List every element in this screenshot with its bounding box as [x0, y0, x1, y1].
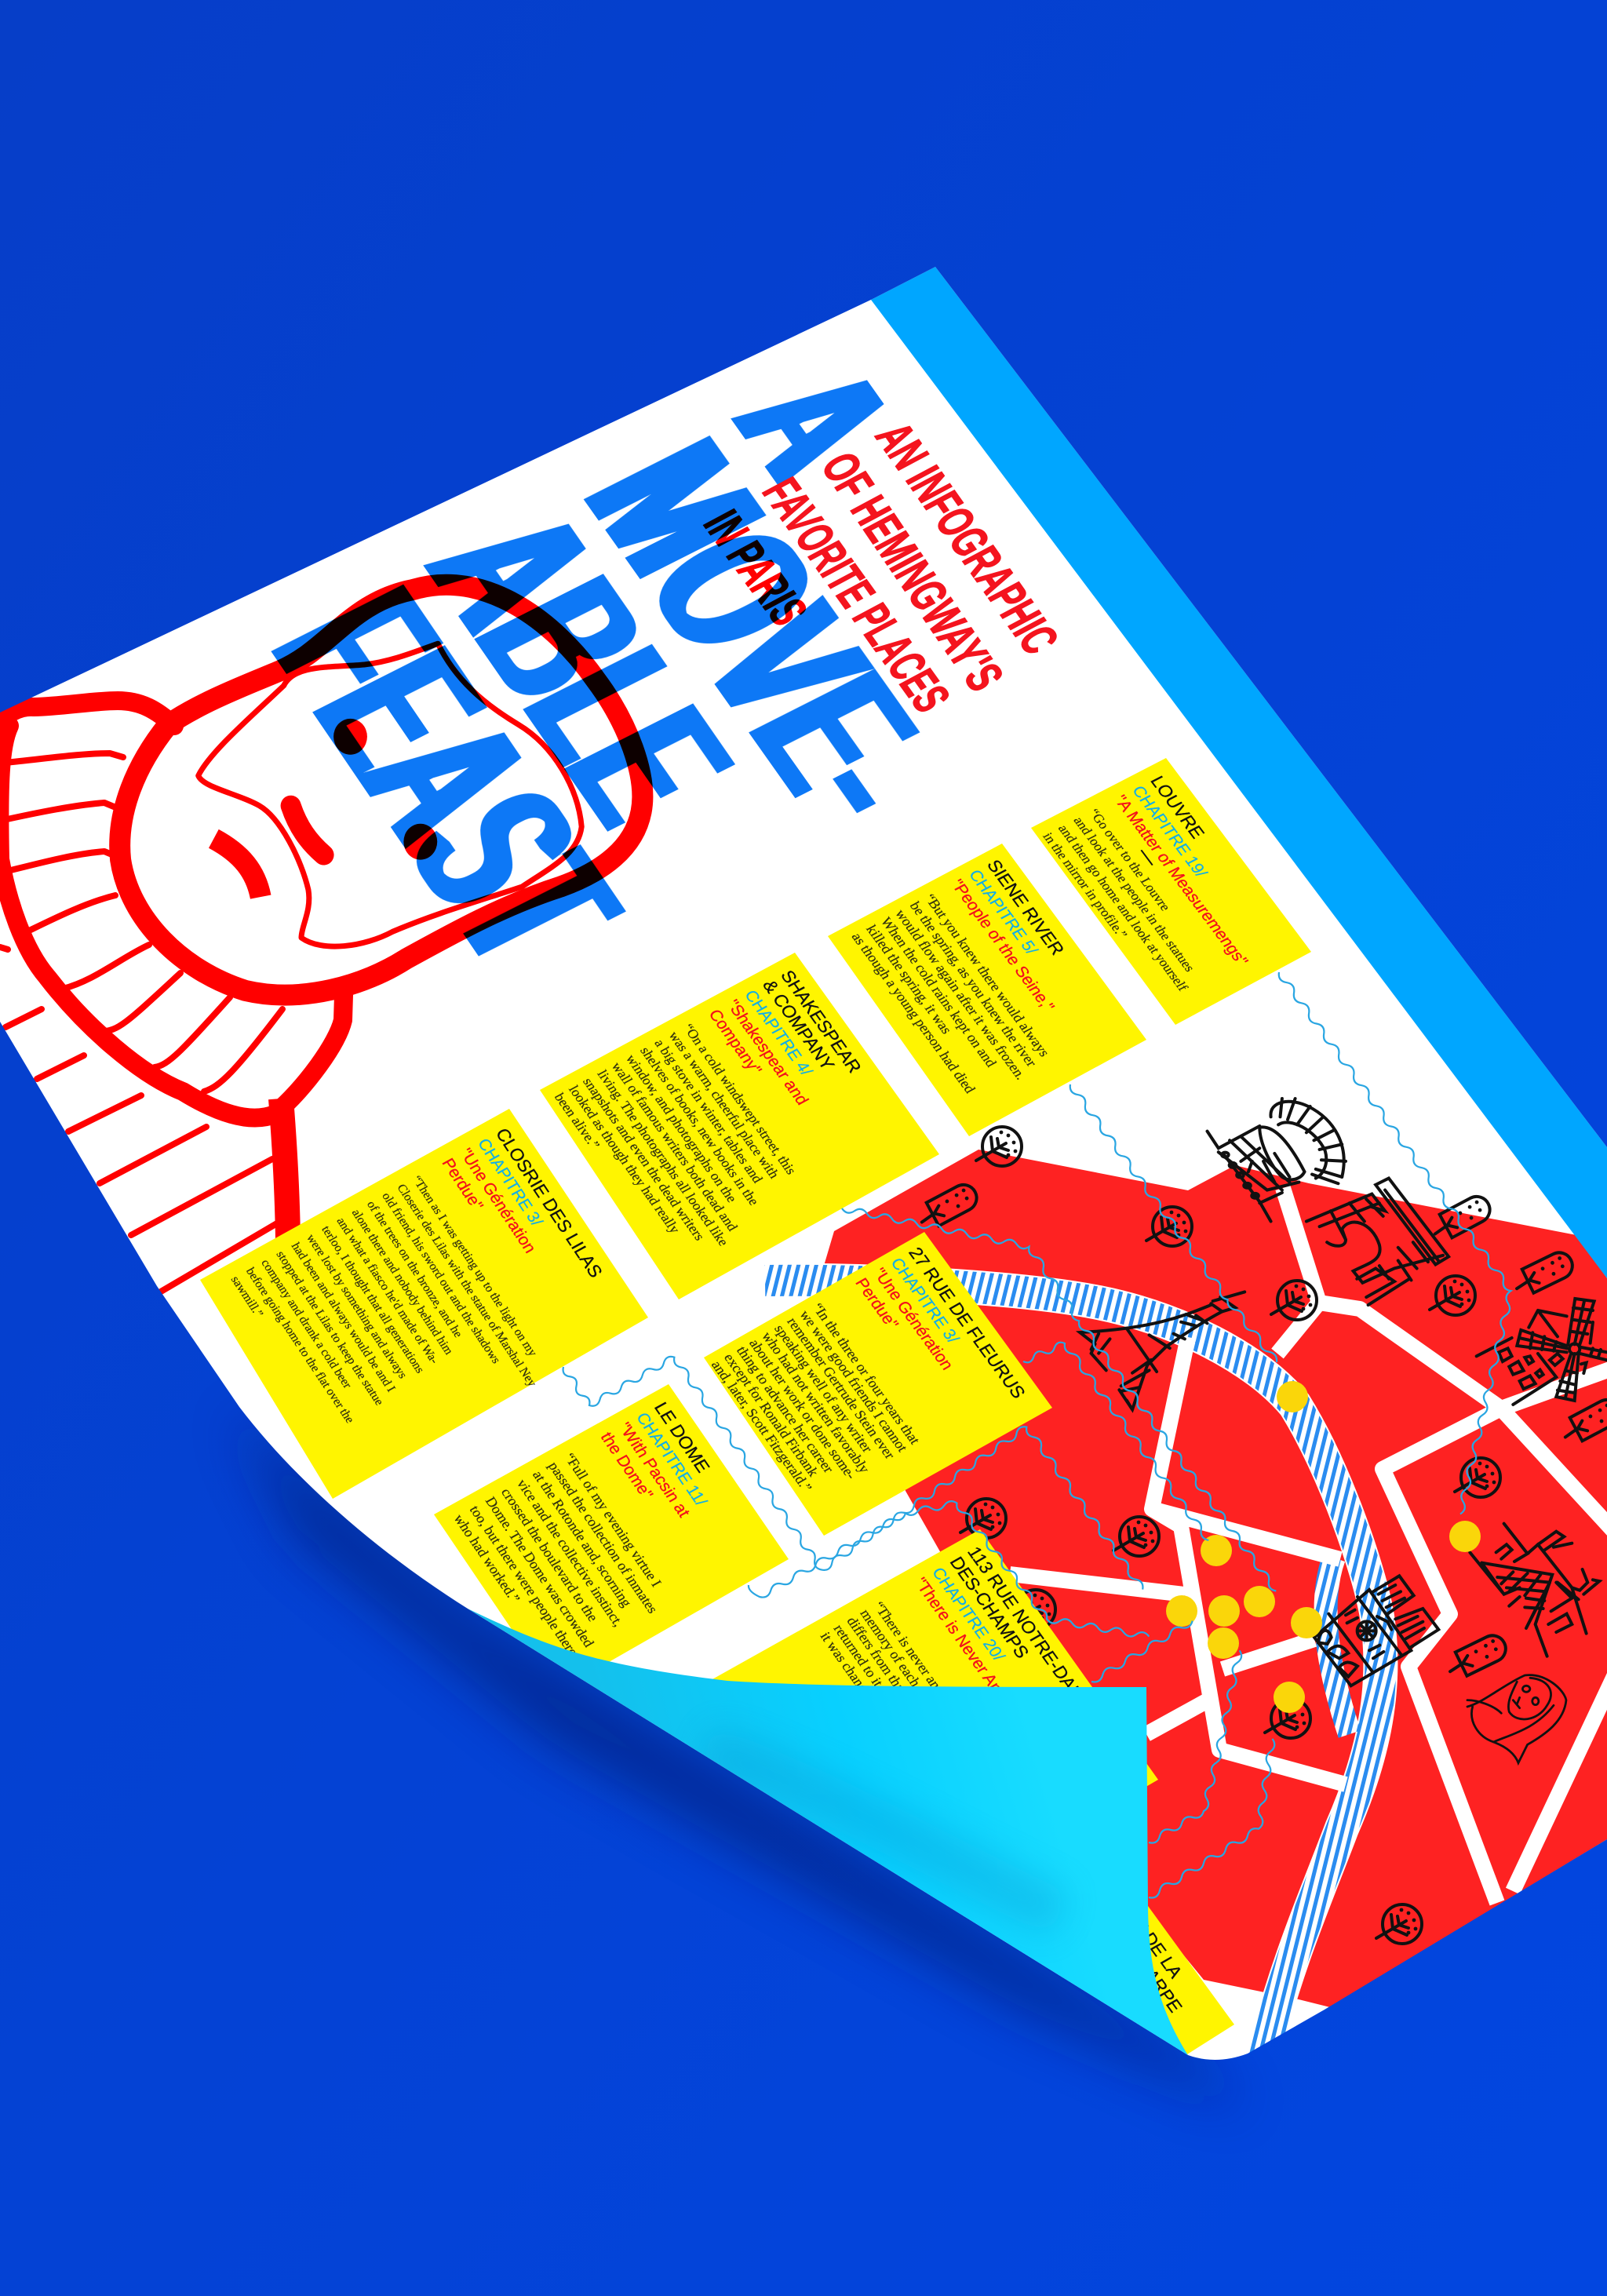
yellow location dots: [1166, 1381, 1481, 1713]
icon: Arc de Triomphe: [1306, 1179, 1448, 1305]
card: Le Dome: "With Pacsin at: [614, 1420, 694, 1520]
route: 113 Rue: [1091, 1621, 1193, 1682]
card: Shakespeare and Company: shelves of books, new books in the: [637, 1044, 763, 1208]
card: Louvre: LOUVRE: [1146, 773, 1209, 841]
head ring: [120, 585, 643, 995]
card: 27 Rue de Fleurus: CHAPITRE 3/: [887, 1256, 963, 1347]
card: 113 Rue Notre-Dame-des-Champs: “There is never any end to Paris and the: [870, 1599, 1015, 1791]
title: A MOVE-ABLE FEAST: MOVE-: [539, 412, 987, 854]
card: Closerie des Lilas: stopped at the Lilas to keep the statue: [273, 1249, 386, 1408]
route: Shakespeare: [842, 1208, 1276, 1591]
card: Shakespeare and Company: "Shakespear and: [723, 997, 812, 1108]
Hemingway portrait: [120, 585, 643, 995]
card: 113 Rue Notre-Dame-des-Champs: returned to it no matter who we were: [830, 1622, 965, 1800]
curled corner: cyan back of the poster: [468, 1609, 1188, 2055]
subtitle: [761, 425, 1057, 712]
card: 27 Rue de Fleurus: remember Gertrude Stein ever: [784, 1315, 898, 1461]
soft shading on the flap: [706, 1750, 1059, 1915]
card: Closerie des Lilas: company and drank a cold beer: [258, 1257, 355, 1391]
card: 27 Rue de Fleurus: and, later, Scott Fitzgerald.”: [709, 1358, 815, 1494]
card: Closerie des Lilas: had been and always would be and I: [289, 1241, 398, 1394]
sweater stripes: [0, 947, 277, 1292]
icon: Notre-Dame: [1314, 1576, 1438, 1686]
card: Place de la Contrescarpe: PLACE DE LA: [1101, 1877, 1187, 1981]
sweater side: [281, 1099, 288, 1240]
card: Place de la Contrescarpe: [1080, 1817, 1234, 2054]
card: Closerie des Lilas: Perdue": [438, 1156, 486, 1213]
card: Siene River: would flow again after it was frozen.: [892, 907, 1029, 1082]
card: Closerie des Lilas: alone there and nobody behind him: [349, 1207, 456, 1357]
card: Louvre: in the mirror in profile.”: [1040, 830, 1131, 941]
title: A MOVE-ABLE FEAST: ABLE: [381, 479, 779, 853]
card: 27 Rue de Fleurus: Perdue": [851, 1275, 902, 1332]
icon: Mona Lisa: [1467, 1675, 1566, 1763]
card: Shakespeare and Company: [540, 953, 939, 1299]
card: Shakespeare and Company: a big stove in winter, tables and: [651, 1037, 767, 1186]
route: Louvre: [1279, 972, 1510, 1514]
card: Siene River: killed the spring, it was: [863, 923, 955, 1037]
card: 27 Rue de Fleurus: 27 RUE DE FLEURUS: [905, 1244, 1029, 1401]
card: Louvre: “Go over to the Louvre: [1086, 807, 1174, 913]
card: Shakespeare and Company: was a warm, cheerful place with: [665, 1029, 783, 1181]
card: Closerie des Lilas: Closerie des Lilas with the statue of Marshal Ney: [394, 1182, 539, 1389]
route: Siene: [1070, 1084, 1277, 1362]
hood ribs: [0, 753, 282, 1092]
roads: [1010, 1188, 1607, 1903]
poster sheet: [0, 267, 1607, 2060]
card: Le Dome: Dome. The Dome was crowded: [483, 1494, 597, 1649]
card: 113 Rue Notre-Dame-des-Champs: DES-CHAMPS: [946, 1553, 1033, 1661]
route: Contrescarpe: [1149, 1739, 1274, 1897]
card: Shakespeare and Company: looked as though they had really: [566, 1083, 683, 1236]
card: Closerie des Lilas: "Une Génération: [456, 1146, 539, 1256]
card: Le Dome: vice and the collective instinct,: [514, 1477, 627, 1629]
card: 27 Rue de Fleurus: except for Ronald Firbank: [721, 1351, 822, 1479]
hood outer line: [0, 701, 344, 1118]
card: 113 Rue Notre-Dame-des-Champs: it was changed or with what difficulties, or: [818, 1630, 971, 1835]
pill-shaped tree icons: [915, 1180, 1607, 1682]
title: A MOVE-ABLE FEAST: [271, 380, 920, 957]
card: Le Dome: at the Rotonde and, scorning: [530, 1468, 635, 1609]
card: Louvre: and look at the people in the statues: [1070, 815, 1198, 974]
card: Shakespeare and Company: Company": [705, 1007, 765, 1077]
card: Shakespeare and Company: window, and photographs on the: [623, 1052, 741, 1204]
card: Louvre: "A Matter of Measuremengs": [1110, 793, 1252, 968]
title: A MOVE-ABLE FEAST: A: [691, 338, 940, 507]
brow and mouth: [291, 806, 324, 855]
title: A MOVE-ABLE FEAST: FEAST: [226, 559, 669, 997]
card: Le Dome: passed the collection of inmates: [545, 1460, 661, 1616]
red map of Paris: [822, 1150, 1607, 2007]
card: 113 Rue Notre-Dame-des-Champs: memory of each person who has lived in it: [857, 1606, 1011, 1811]
tree icons: [960, 1127, 1500, 1944]
card: Siene River: CHAPITRE 5/: [965, 867, 1041, 957]
card: Closerie des Lilas: sawmill.”: [228, 1274, 266, 1320]
card: 27 Rue de Fleurus: we were good friends I cannot: [796, 1308, 911, 1454]
card: Shakespeare and Company: snapshots and even the dead writers: [580, 1075, 709, 1243]
card: Closerie des Lilas: terloo, I thought that all generations: [319, 1224, 427, 1376]
card: Le Dome: crossed the boulevard to the: [498, 1485, 601, 1624]
card: Le Dome: [434, 1384, 789, 1668]
light blue strip: [871, 267, 1607, 1278]
card: Closerie des Lilas: CHAPITRE 3/: [474, 1135, 546, 1230]
card: 27 Rue de Fleurus: “In the three or four years that: [809, 1300, 924, 1447]
card: Closerie des Lilas: were lost by something and always: [304, 1232, 410, 1381]
hood, collar ribs and sweater: [0, 701, 344, 1292]
card: 27 Rue de Fleurus: about her work or done some-: [746, 1336, 860, 1481]
card: Louvre: and then go home and look at yourself: [1055, 822, 1191, 993]
card: 113 Rue Notre-Dame-des-Champs: "There is Never Any End to Paris": [910, 1575, 1069, 1784]
card: Closerie des Lilas: old friend, his sword out and the shadows: [379, 1190, 503, 1365]
eyes: [333, 719, 367, 755]
card: Shakespeare and Company: “On a cold windswept street, this: [680, 1021, 800, 1177]
icon: Moulin Rouge windmill: [1477, 1299, 1607, 1405]
icon: Louvre pyramid: [1470, 1524, 1599, 1656]
card: Shakespeare and Company: been alive.”: [552, 1091, 603, 1151]
subtitle: AN INFOGRAPHIC: [865, 414, 1070, 662]
icon: Eiffel Tower: [1080, 1292, 1244, 1409]
card: 113 Rue Notre-Dame-des-Champs: 113 RUE NOTRE-DAME-: [964, 1543, 1099, 1720]
poster paper: [0, 267, 1607, 2060]
river with striped water: [765, 1281, 1380, 2056]
card: Shakespeare and Company: SHAKESPEAR: [777, 967, 865, 1076]
card: 113 Rue Notre-Dame-des-Champs: CHAPITRE 20/: [928, 1565, 1008, 1664]
card: 27 Rue de Fleurus: thing to advance her career: [734, 1343, 837, 1475]
shadow under the curled corner: [235, 1412, 1248, 2111]
card: Closerie des Lilas: “Then as I was getting up to the light on my: [410, 1174, 540, 1358]
card: 27 Rue de Fleurus: [704, 1232, 1052, 1536]
route: Le Dome: [749, 1501, 1149, 1637]
card: Le Dome: CHAPITRE 11/: [632, 1410, 710, 1509]
card: Closerie des Lilas: [200, 1109, 648, 1499]
card: Siene River: When the cold rains kept on and: [877, 915, 1000, 1070]
card: Shakespeare and Company: living. The photographs all looked like: [594, 1067, 732, 1248]
card: Siene River: be the spring, as you knew the river: [907, 899, 1040, 1069]
card: 27 Rue de Fleurus: who had not written favorably: [759, 1329, 873, 1475]
wavy route lines linking cards to map: [563, 972, 1510, 1897]
card: Place de la Contrescarpe: CONTRESCARPE: [1080, 1884, 1186, 2016]
card: 113 Rue Notre-Dame-des-Champs: [698, 1529, 1158, 1860]
route: lower left: [1149, 1650, 1241, 1843]
card: 27 Rue de Fleurus: speaking well of any writer: [771, 1322, 876, 1455]
card: Louvre: [1031, 758, 1311, 1025]
card: Closerie des Lilas: before going home to the flat over the: [243, 1266, 357, 1426]
card: 113 Rue Notre-Dame-des-Champs: differs from that of any other. We always: [844, 1614, 992, 1810]
subtitle: OF HEMINGWAY'S: [811, 444, 1015, 699]
card: Siene River: “But you knew there would always: [921, 891, 1053, 1059]
card: Le Dome: too, but there were people there: [466, 1503, 581, 1658]
card: Siene River: "People of the Seine,": [947, 876, 1058, 1014]
card: Shakespeare and Company: & COMPANY: [759, 977, 839, 1073]
subtitle: FAVORITE PLACES: [752, 470, 961, 720]
card: Siene River: as though a young person had died: [848, 930, 978, 1095]
card: Le Dome: the Dome": [597, 1430, 656, 1502]
card: Shakespeare and Company: CHAPITRE 4/: [741, 987, 816, 1079]
route: 27 Rue de Fleurus: [1023, 1343, 1208, 1540]
card: Siene River: SIENE RIVER: [983, 856, 1069, 958]
face outline: [199, 643, 581, 946]
card: Le Dome: LE DOME: [650, 1399, 714, 1476]
icon: Luxembourg fountain monument: [1207, 1099, 1346, 1222]
card: Shakespeare and Company: wall of famous writers both dead and: [608, 1059, 742, 1234]
route: Closerie des Lilas: [563, 1357, 1142, 1590]
card: Le Dome: “Full of my evening virtue I: [561, 1450, 665, 1589]
card: 27 Rue de Fleurus: "Une Génération: [869, 1265, 957, 1373]
subtitle: in Paris: IN PARIS: [693, 502, 818, 633]
card: Closerie des Lilas: CLOSRIE DES LILAS: [492, 1124, 607, 1281]
card: Siene River: [828, 844, 1146, 1136]
card: Louvre: CHAPITRE 19/: [1128, 783, 1211, 880]
card: Closerie des Lilas: of the trees on the bronze, and he: [364, 1199, 465, 1339]
card: Closerie des Lilas: and what a fiasco he'd made of Wa-: [333, 1215, 441, 1366]
card: Le Dome: who had worked.”: [450, 1512, 523, 1605]
